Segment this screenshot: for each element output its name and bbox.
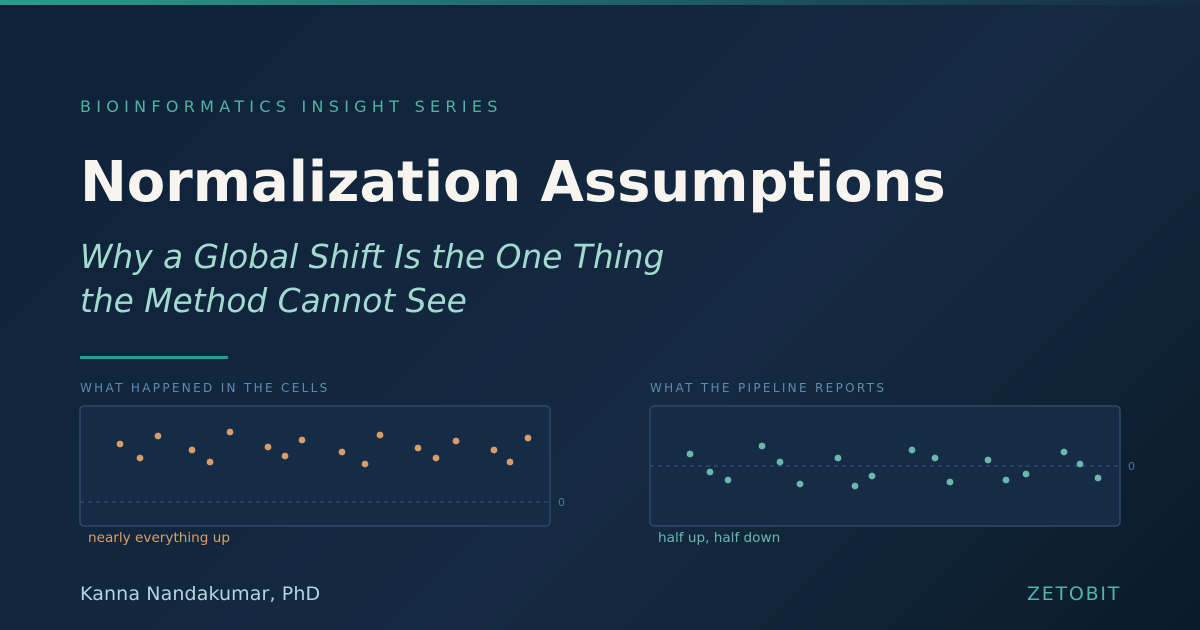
author: Kanna Nandakumar, PhD	[80, 583, 320, 605]
panel: what the pipeline reports	[649, 381, 1135, 546]
accent divider	[80, 356, 228, 359]
caption: pipeline: half up, half down	[658, 530, 780, 546]
subtitle: the Method Cannot See	[80, 282, 467, 320]
panel heading: pipeline: WHAT THE PIPELINE REPORTS	[650, 381, 886, 395]
title: Normalization Assumptions	[80, 150, 946, 215]
brand: ZETOBIT	[1027, 583, 1121, 605]
panel heading: cells: WHAT HAPPENED IN THE CELLS	[80, 381, 330, 395]
top accent bar	[0, 0, 1200, 5]
zero label: pipeline: 0	[1128, 460, 1135, 473]
series label: BIOINFORMATICS INSIGHT SERIES	[80, 97, 503, 116]
caption: cells: nearly everything up	[88, 530, 230, 546]
panel: what happened in the cells	[79, 381, 565, 546]
dot plot: cells	[79, 405, 551, 527]
zero label: cells: 0	[558, 496, 565, 509]
dot plot: pipeline	[649, 405, 1121, 527]
subtitle	[80, 238, 664, 320]
subtitle: Why a Global Shift Is the One Thing	[80, 238, 664, 276]
